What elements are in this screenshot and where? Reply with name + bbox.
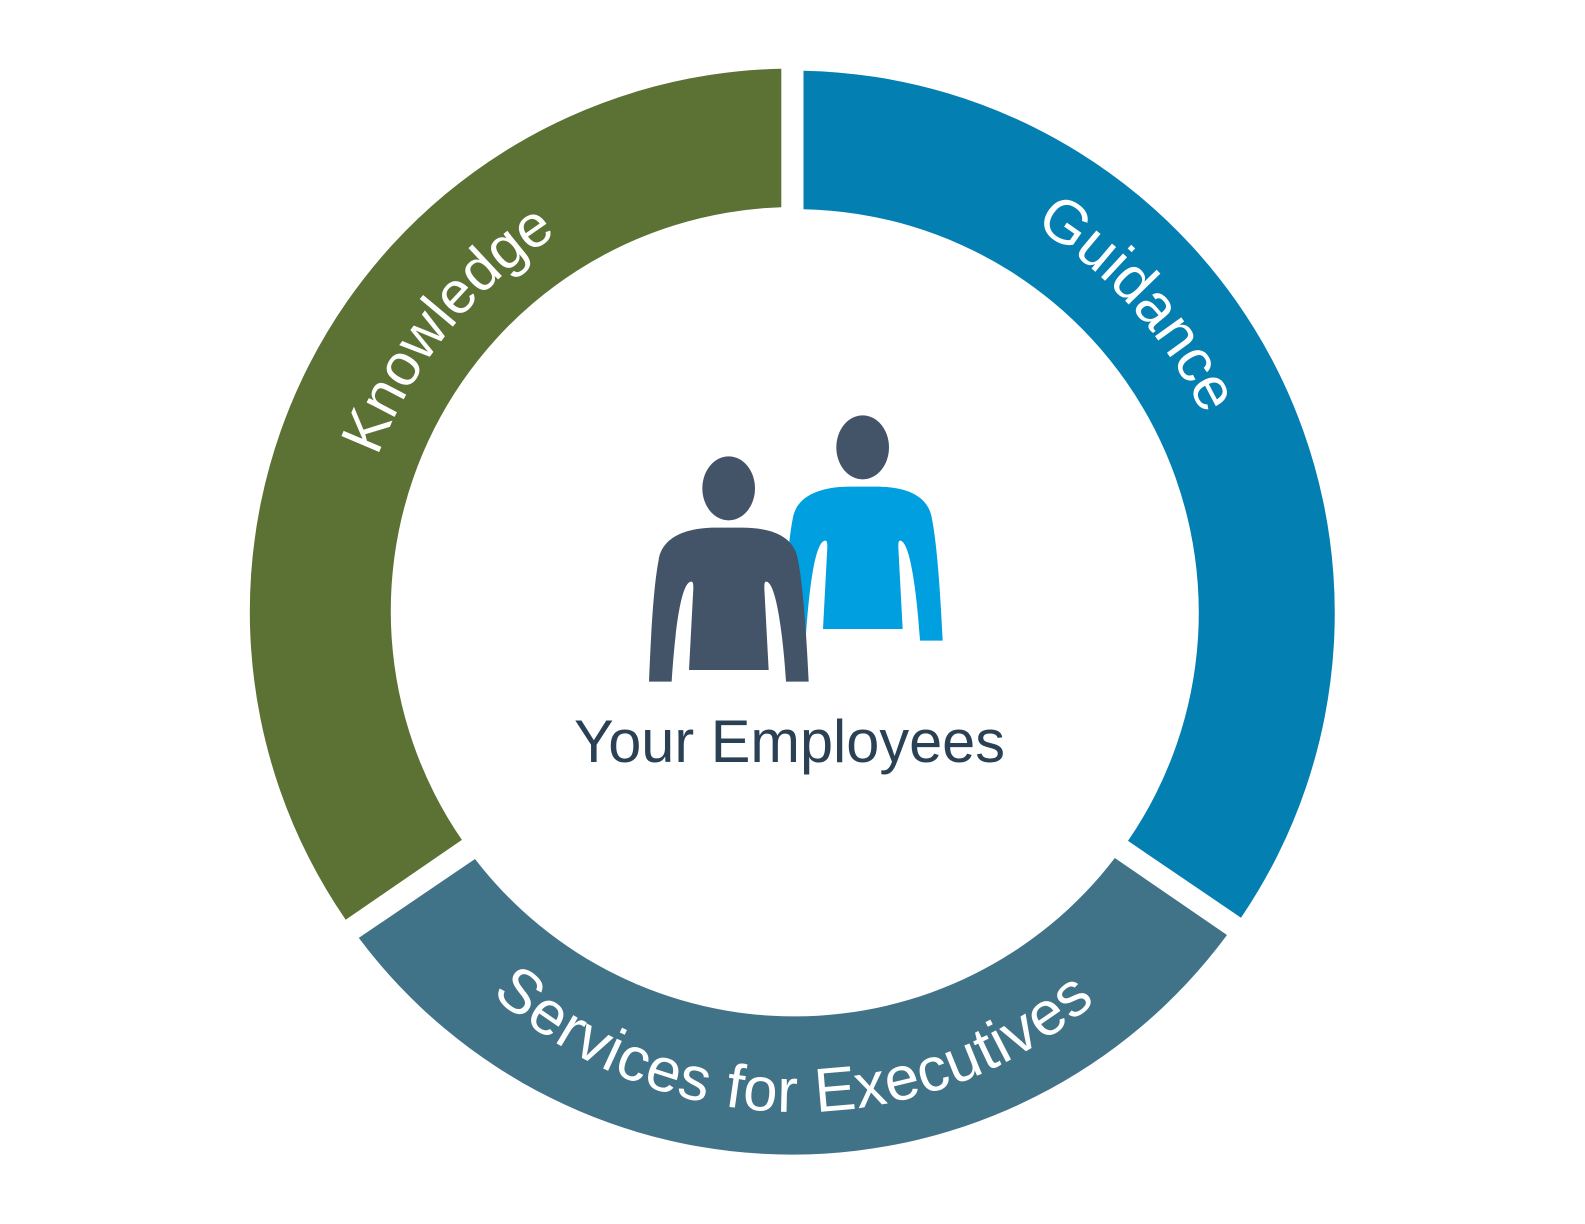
icon: front person	[649, 456, 809, 682]
panel: Guidance segment	[804, 70, 1335, 918]
heading: Your Employees: Your Employees	[574, 708, 1005, 775]
label: Guidance: Guidance	[1044, 200, 1227, 410]
label: Services for Executives: Services for Executives	[498, 969, 1091, 1112]
icon: two employees	[649, 415, 943, 682]
panel: Knowledge segment	[250, 68, 782, 920]
icon: back person	[783, 415, 943, 641]
panel: Services for Executives segment	[358, 858, 1227, 1155]
label: Knowledge: Knowledge	[342, 214, 550, 452]
